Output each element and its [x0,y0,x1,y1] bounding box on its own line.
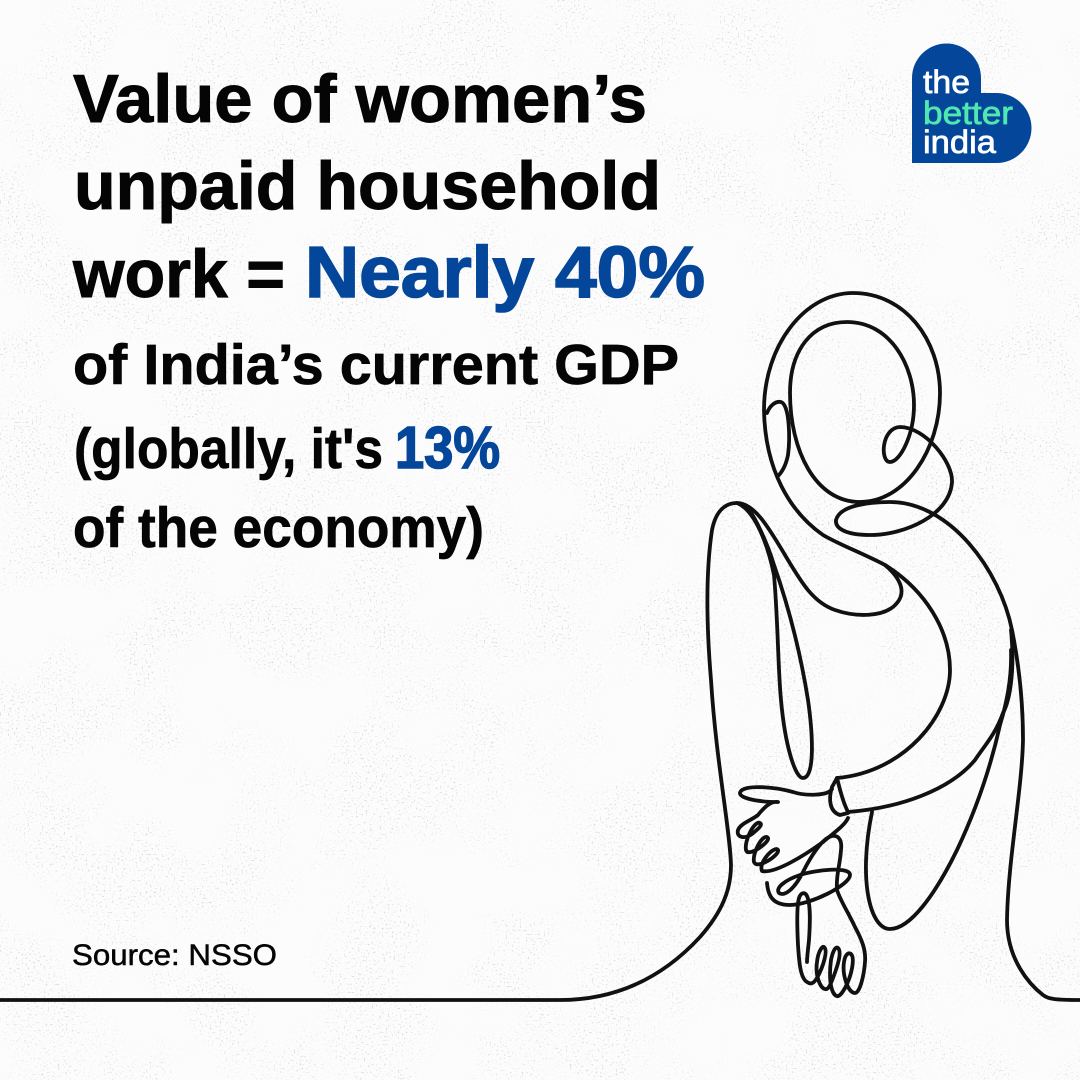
highlighted figure: 13%: 13% [395,415,500,481]
sleeve bottom [848,630,1012,812]
upper arm and sleeve top [837,565,950,812]
logo word: india: india [923,124,996,160]
subheading line 1: of India’s current GDP [73,333,679,397]
draped scarf loop [737,503,812,778]
ground line, shoulder, hood and face outline [0,293,1080,1000]
highlighted figure: nearly 40%: Nearly 40% [305,233,705,313]
upper hand and fingers [738,787,848,871]
crossed wrist loop [767,836,865,996]
illustration: single-line drawing of a seated woman [0,293,1080,1000]
subheading line 3: of the economy) [73,496,484,560]
logo: the better india heart [912,43,1032,163]
cuff [830,778,848,815]
title: value of women's unpaid household work [72,61,705,313]
heading line 1: Value of women’s [73,61,647,137]
heading line 3 start: work = [72,236,285,312]
logo word: better: better [923,95,1013,131]
subheading: share of GDP and global comparison [73,333,679,560]
logo word: the: the [923,64,970,100]
torso line [866,650,1011,929]
ear [767,402,789,476]
source note: Source: NSSO [72,939,277,972]
heading line 2: unpaid household [74,148,661,224]
subheading line 2: (globally, it's [74,417,383,481]
logo heart shape [912,43,1032,163]
